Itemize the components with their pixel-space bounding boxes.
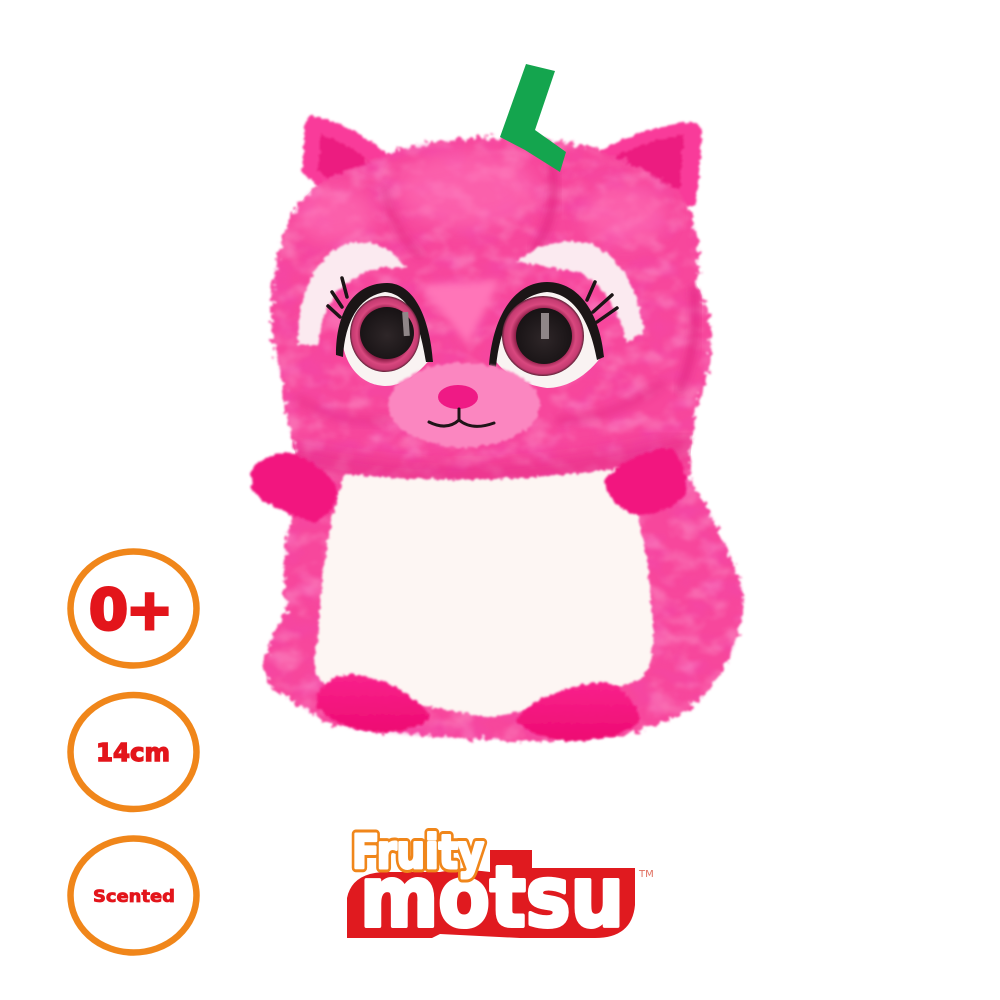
plush toy [250,64,744,741]
trademark: TM [638,869,654,880]
fur shading [293,152,695,475]
left eye [328,278,433,386]
right eye [489,282,617,388]
badge: scented: Scented [93,887,175,907]
fur texture [266,138,744,740]
brand logo [347,825,654,946]
forehead tuft [420,280,500,345]
badge: age 0+ [70,552,196,666]
logo word: fruity: Fruity [352,825,484,879]
belly [314,468,654,718]
logo word: motsu: motsu [360,848,624,946]
nose [438,385,478,409]
logo red backing [347,850,635,938]
badge: scented [70,838,196,952]
fur silhouette [266,138,744,740]
feet [316,674,640,741]
white brow patches [298,242,644,345]
muzzle [388,363,540,447]
logo word: fruity: Fruity [352,825,484,879]
arms [250,448,687,522]
ears [302,116,702,210]
badge: size 14cm [70,695,196,809]
badge: size 14cm: 14cm [96,738,170,767]
stem and leaf [500,64,566,172]
mouth [429,409,494,426]
badge: age 0+: 0+ [89,578,173,643]
